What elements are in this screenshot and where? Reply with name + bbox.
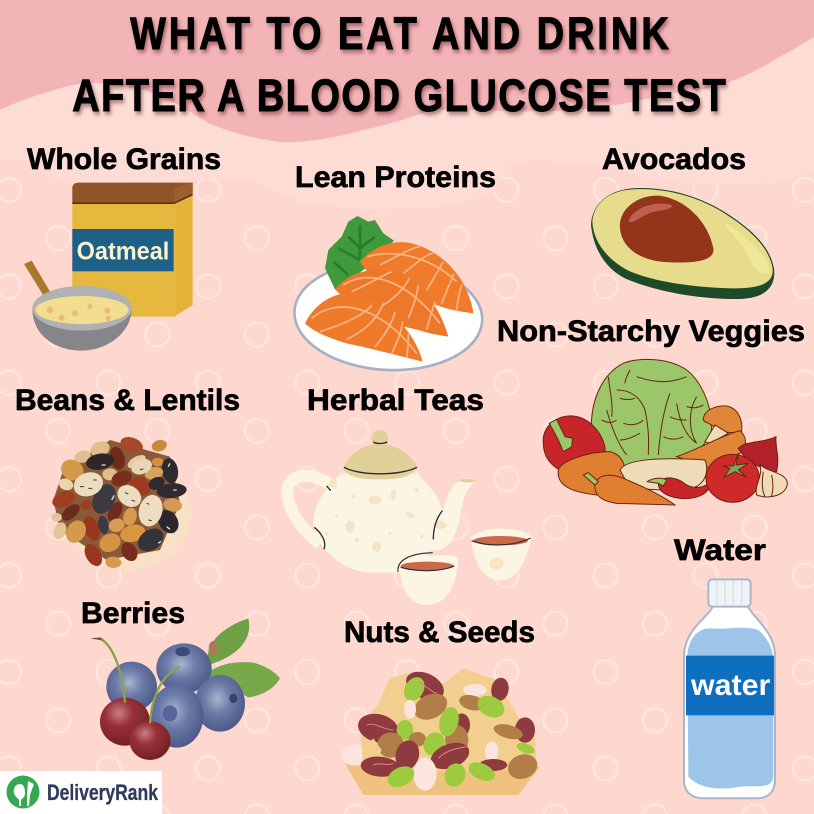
icon: salmon on plate	[292, 216, 485, 375]
label: water: Water	[674, 534, 766, 567]
label: non-starchy veggies: Non-Starchy Veggies	[497, 315, 805, 348]
label: nuts and seeds: Nuts & Seeds	[344, 616, 535, 649]
label: berries: Berries	[81, 597, 185, 630]
icon: oatmeal box and bowl	[24, 183, 193, 351]
icon: oatmeal box and bowl: Oatmeal	[77, 237, 169, 265]
label: herbal teas: Herbal Teas	[307, 384, 484, 417]
icon: mixed beans	[50, 434, 192, 570]
icon: mixed nuts and seeds	[341, 666, 541, 795]
icon: avocado	[591, 188, 774, 299]
label: beans and lentils: Beans & Lentils	[15, 384, 240, 417]
icon: water bottle	[684, 579, 775, 798]
label: lean proteins: Lean Proteins	[295, 161, 496, 194]
logo: DeliveryRank: DeliveryRank	[47, 780, 159, 805]
icon: teapot and cups	[287, 430, 532, 605]
icon: berries	[90, 618, 280, 760]
label: avocados: Avocados	[602, 143, 746, 176]
icon: vegetables	[543, 359, 787, 505]
title	[72, 8, 726, 121]
logo: DeliveryRank	[0, 771, 162, 814]
label: whole grains: Whole Grains	[27, 143, 221, 176]
icon: water bottle: water	[690, 669, 771, 702]
header wave	[0, 0, 814, 142]
title: WHAT TO EAT AND DRINK	[130, 8, 669, 59]
title: AFTER A BLOOD GLUCOSE TEST	[72, 70, 726, 121]
